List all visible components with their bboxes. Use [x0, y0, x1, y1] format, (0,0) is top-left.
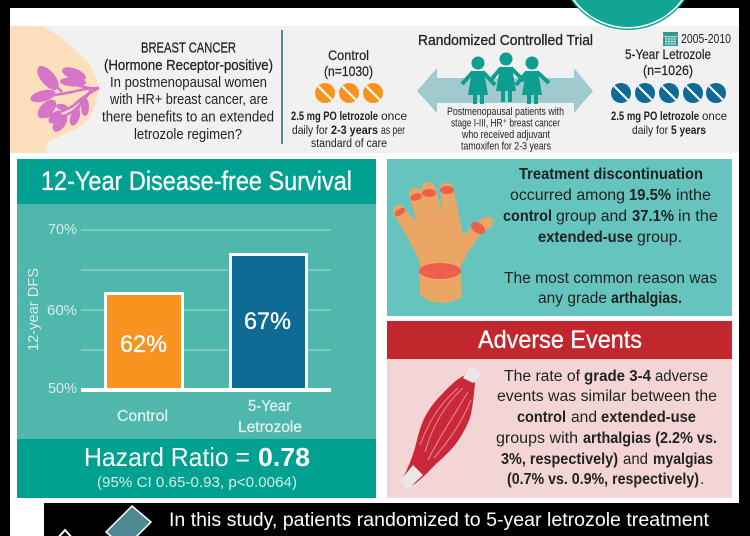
- icon: calendar: [663, 32, 678, 46]
- text: control regimen: daily for: [292, 125, 328, 137]
- text: letrozole regimen: daily for: [632, 123, 668, 137]
- text: discontinuation rates: extended-use: [538, 229, 633, 246]
- text: study population: stage I-III, HR⁺ breast cancer: [451, 118, 560, 130]
- text: study population: Postmenopausal patients with: [447, 106, 564, 118]
- text: discontinuation rates: The most common reason was: [504, 270, 717, 287]
- text: discontinuation rates: arthalgias.: [611, 290, 682, 307]
- text: adverse event rates: and: [571, 409, 597, 426]
- text: conclusion: In this study, patients randomized to 5-year letrozole treatment: [169, 510, 710, 531]
- text: discontinuation rates: group.: [637, 229, 682, 246]
- text: discontinuation rates: any grade: [538, 290, 607, 307]
- text: control regimen: standard of care: [311, 138, 387, 150]
- extended letrozole arm: [611, 46, 727, 137]
- bar chart: 5-Year: [248, 398, 291, 415]
- text: clinical question: there benefits to an extended: [102, 110, 274, 126]
- arrow: two-way randomization: [417, 68, 593, 113]
- text: adverse event rates: The rate of: [504, 368, 581, 385]
- text: discontinuation rates: inthe: [676, 187, 711, 204]
- text: adverse event rates: [496, 368, 717, 488]
- text: adverse event rates: control: [517, 409, 566, 426]
- panel heading: [387, 321, 732, 359]
- text: study dates: 2005-2010: [681, 32, 731, 46]
- icon: orange pills: [315, 83, 383, 103]
- text: adverse event rates: extended-use: [601, 409, 696, 426]
- control arm: [291, 47, 407, 150]
- bar chart: Letrozole: [238, 419, 302, 436]
- icon: breast with ducts: [10, 26, 99, 153]
- text: adverse event rates: groups with: [496, 430, 578, 447]
- bar chart: 70%: [48, 221, 77, 238]
- text: clinical question: In postmenopausal women: [110, 75, 267, 91]
- text: adverse event rates: myalgias: [653, 451, 713, 468]
- text: study population: [447, 106, 564, 152]
- text: discontinuation rates: in the: [678, 208, 718, 225]
- text: discontinuation rates: 37.1%: [632, 208, 674, 225]
- badge circle at top: [559, 0, 697, 30]
- text: control regimen: 2.5 mg PO letrozole: [291, 111, 378, 123]
- text: clinical question: letrozole regimen?: [134, 127, 242, 143]
- bar: control: [106, 294, 182, 390]
- hazard ratio footer: [17, 439, 376, 498]
- icon: three patients: [462, 52, 549, 104]
- panel heading: 12-Year Disease-free Survival: [41, 166, 352, 196]
- heading: randomized controlled trial: Randomized Controlled Trial: [418, 32, 593, 49]
- icon: muscle: [400, 366, 482, 490]
- text: discontinuation rates: occurred among: [510, 187, 625, 204]
- hazard ratio footer: Hazard Ratio =: [84, 442, 250, 472]
- icon: prescription pen: [56, 506, 151, 536]
- text: clinical question: BREAST CANCER: [141, 40, 236, 56]
- bar chart: Control: [117, 408, 168, 425]
- text: control regimen: once: [381, 111, 407, 123]
- extended letrozole arm: 5-Year Letrozole: [625, 46, 711, 62]
- text: control regimen: 2-3 years: [331, 125, 378, 137]
- panel: 12-year disease-free survival: [17, 159, 376, 498]
- bar chart: 12-year DFS: [25, 268, 42, 351]
- icon: hand with joint pain: [393, 182, 493, 303]
- control arm: Control: [328, 47, 369, 63]
- text: study population: who received adjuvant: [461, 129, 550, 141]
- bar chart: 50%: [48, 380, 77, 397]
- panel heading: Adverse Events: [478, 326, 642, 354]
- conclusion bar: [44, 503, 750, 536]
- text: adverse event rates: arthalgias (2.2% vs.: [583, 430, 717, 447]
- text: adverse event rates: events was similar between the: [497, 388, 717, 405]
- hazard ratio footer: 0.78: [258, 442, 310, 472]
- bar: 5-year letrozole: [230, 254, 306, 390]
- icon: blue pills: [611, 83, 726, 103]
- text: letrozole regimen: 2.5 mg PO letrozole: [611, 109, 699, 123]
- text: adverse event rates: adverse: [655, 368, 708, 385]
- text: clinical question: (Hormone Receptor-positive): [104, 58, 273, 74]
- extended letrozole arm: (n=1026): [643, 62, 693, 78]
- text: discontinuation rates: control: [503, 208, 552, 225]
- text: discontinuation rates: group and: [556, 208, 627, 225]
- text: discontinuation rates: [503, 166, 718, 307]
- text: letrozole regimen: once: [702, 109, 727, 123]
- text: control regimen: as per: [381, 125, 405, 137]
- bar chart: 60%: [47, 302, 77, 319]
- control arm: (n=1030): [324, 63, 373, 79]
- text: adverse event rates: and: [623, 451, 648, 468]
- bar: control: 62%: [120, 331, 167, 358]
- text: clinical question: with HR+ breast cancer, are: [109, 92, 268, 108]
- text: discontinuation rates: Treatment discontinuation: [519, 166, 703, 183]
- text: adverse event rates: grade 3-4: [584, 368, 651, 385]
- text: adverse event rates: .: [700, 471, 704, 488]
- text: adverse event rates: 3%, respectively): [501, 451, 618, 468]
- text: control regimen: [291, 111, 407, 150]
- text: discontinuation rates: 19.5%: [629, 187, 671, 204]
- hazard ratio footer: (95% CI 0.65-0.93, p<0.0064): [97, 475, 297, 491]
- panel: treatment discontinuation: [387, 159, 732, 316]
- top intro band: [10, 26, 739, 153]
- bar chart: [25, 221, 331, 436]
- text: clinical question: [102, 40, 274, 143]
- bar: 5-year letrozole: 67%: [244, 308, 291, 335]
- text: letrozole regimen: [611, 109, 727, 137]
- text: study population: tamoxifen for 2-3 years: [461, 140, 551, 152]
- text: adverse event rates: (0.7% vs. 0.9%, respectively): [507, 471, 699, 488]
- panel heading: [17, 159, 376, 204]
- panel: adverse events: [387, 321, 732, 498]
- text: letrozole regimen: 5 years: [671, 123, 706, 137]
